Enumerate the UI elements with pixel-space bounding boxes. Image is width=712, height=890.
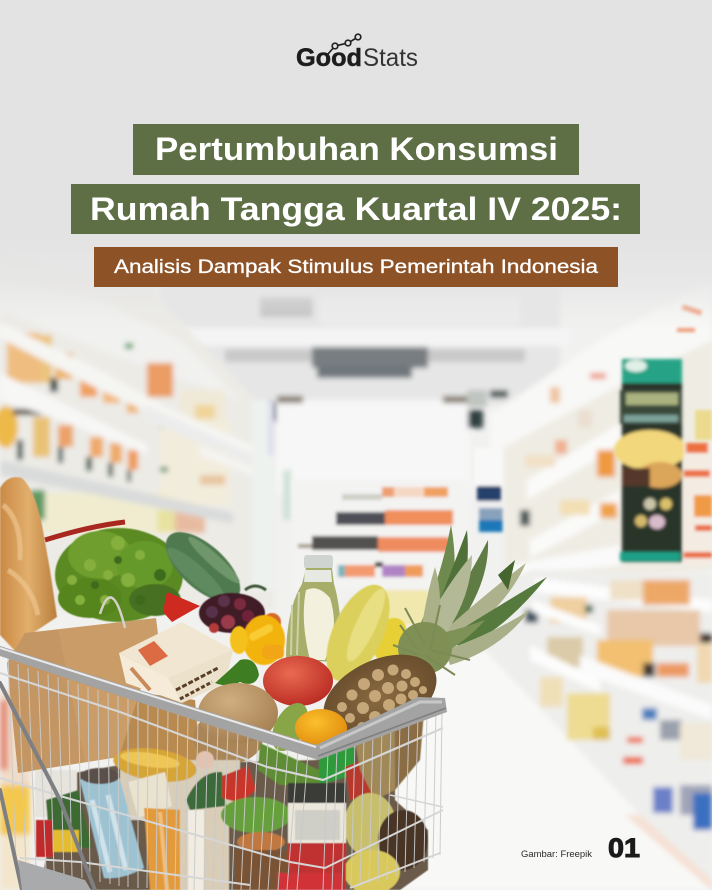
lower cart contents bbox=[35, 725, 428, 890]
top grey fade bbox=[0, 0, 712, 330]
image credit: Gambar: Freepik bbox=[521, 849, 592, 860]
yellow squash bbox=[313, 575, 413, 691]
red packet bbox=[163, 592, 200, 622]
milk carton box bbox=[119, 622, 233, 703]
salad bbox=[221, 797, 291, 833]
left lower shelf bbox=[43, 493, 173, 533]
page number: 01 bbox=[608, 833, 640, 863]
left shelf row two products bbox=[0, 406, 18, 448]
zucchini and orange bbox=[265, 697, 347, 757]
shopping cart with groceries bbox=[0, 477, 547, 890]
logo chart line icon bbox=[328, 34, 361, 54]
title banner line 2: Rumah Tangga Kuartal IV 2025: bbox=[90, 191, 622, 227]
right lower shelves bbox=[483, 570, 712, 890]
berries bbox=[199, 586, 281, 633]
left shelf base bbox=[0, 250, 275, 610]
round bread bun bbox=[193, 683, 278, 764]
red pepper bbox=[222, 766, 256, 803]
promotional display stand bbox=[614, 304, 712, 565]
pineapple leaves bbox=[405, 525, 547, 665]
bottom-left blurred aisle bbox=[0, 690, 30, 890]
title banner line 1: Pertumbuhan Konsumsi bbox=[155, 131, 558, 167]
contents backdrop bbox=[40, 735, 428, 890]
white can bbox=[180, 807, 229, 890]
paper bag bbox=[7, 597, 200, 775]
jar bbox=[288, 783, 346, 890]
logo wordmark light: Stats bbox=[363, 44, 418, 72]
tomato bbox=[263, 656, 333, 706]
cart wire basket bbox=[8, 658, 442, 890]
cart lower rails bbox=[0, 673, 443, 888]
pineapple spiky lower leaves bbox=[393, 605, 470, 685]
cart base bbox=[18, 860, 91, 890]
centre shelves bbox=[292, 448, 504, 625]
logo wordmark bold: Good bbox=[296, 44, 362, 72]
yellow bell pepper bbox=[230, 615, 285, 665]
subtitle banner: Analisis Dampak Stimulus Pemerintah Indonesia bbox=[114, 257, 598, 278]
orange packet bbox=[144, 808, 190, 890]
subtitle banner bbox=[94, 247, 618, 287]
dark herb bbox=[186, 772, 226, 810]
cart frame bar bbox=[0, 683, 95, 890]
canned goods bbox=[80, 771, 144, 878]
title banner line 2 bbox=[71, 184, 640, 234]
green pepper bbox=[215, 659, 259, 685]
floor bbox=[350, 640, 712, 890]
right upper shelves bbox=[505, 285, 712, 590]
cart top rim bbox=[0, 646, 447, 760]
green vegetable roll bbox=[154, 520, 252, 614]
left shelf edges bbox=[0, 373, 147, 455]
oil bottle bbox=[286, 555, 342, 662]
title banner line 1 bbox=[133, 124, 579, 175]
leaflet bbox=[128, 772, 172, 818]
logo: GoodStats bbox=[296, 34, 418, 72]
lettuce bbox=[55, 528, 183, 622]
baguette bbox=[0, 477, 57, 652]
cart back handle bbox=[45, 522, 125, 540]
pineapple lower body under rim bbox=[355, 700, 425, 790]
left shelf row one products bbox=[7, 333, 40, 383]
pineapple body bbox=[310, 638, 450, 754]
